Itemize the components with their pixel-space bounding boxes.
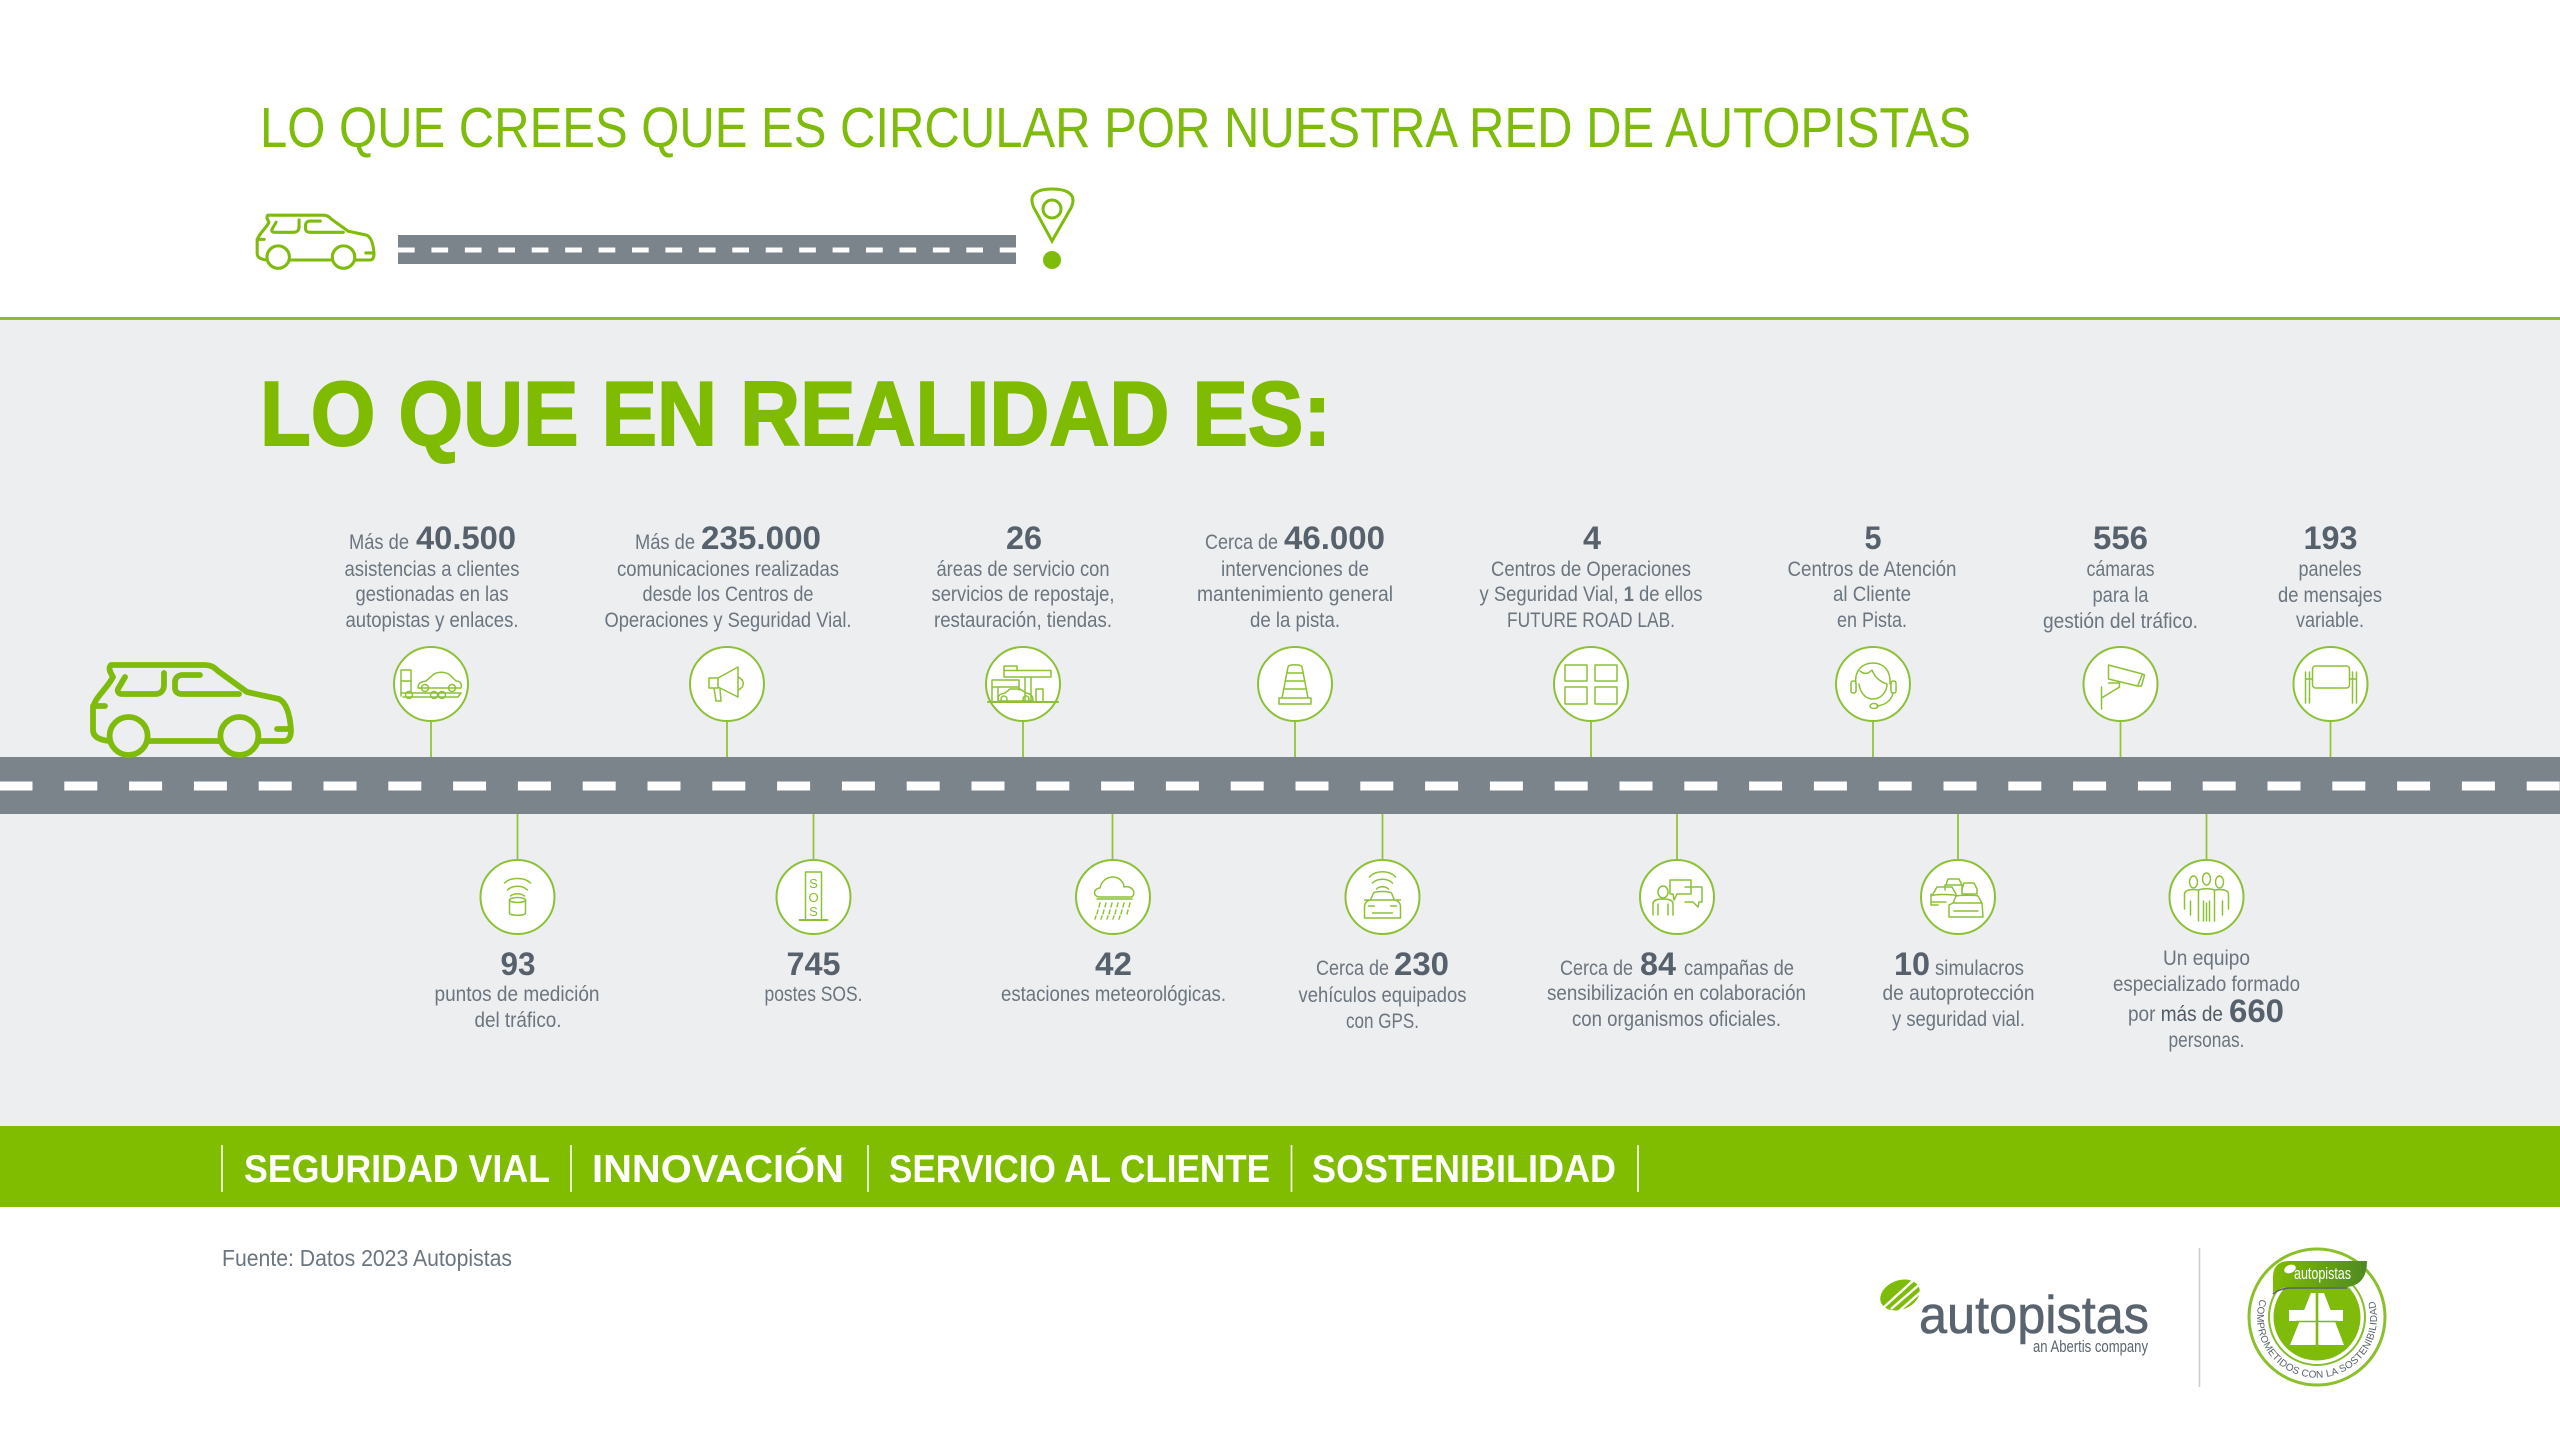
text: 40.500: 40.500 [416, 520, 516, 556]
text: 26: 26 [1006, 520, 1042, 556]
stat: 235.000 comunicaciones [604, 520, 852, 757]
text: 84: Cerca de [1560, 957, 1633, 980]
text: 46.000 [1197, 520, 1393, 632]
text: 235.000: Más de [635, 531, 695, 554]
text: 40.500: gestionadas en las [356, 583, 508, 606]
text: 235.000: 235.000 [701, 520, 821, 556]
stat: 660 personas [2113, 814, 2300, 1052]
stat: 4 centros de operaciones [1480, 520, 1702, 757]
icon: cctv camera [2084, 647, 2158, 721]
icon: control room grid [1554, 647, 1628, 721]
icon: location pin [1032, 189, 1073, 269]
text: 42: 42 [1095, 946, 1132, 982]
text: 235.000: comunicaciones realizadas [617, 558, 839, 581]
text: 10: 10 [1894, 946, 1930, 982]
icon: SOS post: S [809, 876, 818, 891]
text: 93: del tráfico. [474, 1009, 562, 1032]
section: expectation [257, 96, 1971, 269]
text: 745: postes SOS. [764, 983, 862, 1006]
heading: LO QUE EN REALIDAD ES: [260, 364, 1331, 465]
text: 230 [1298, 946, 1466, 1033]
band: values [0, 1126, 2560, 1207]
text: 5: Centros de Atención [1788, 558, 1956, 581]
stat: 193 paneles [2278, 520, 2382, 757]
text: 235.000: Operaciones y Seguridad Vial. [604, 609, 852, 632]
stat: 84 campañas [1547, 814, 1806, 1031]
icon: large car [93, 665, 291, 755]
text: 5: en Pista. [1837, 609, 1907, 632]
text: 556: para la [2092, 584, 2149, 607]
text: 660: Un equipo [2163, 947, 2250, 970]
text: 745 [764, 946, 862, 1006]
text: 235.000 [604, 520, 852, 632]
text: 5: 5 [1864, 520, 1882, 556]
band: values: SEGURIDAD VIAL [244, 1148, 550, 1191]
stat: 556 cámaras [2043, 520, 2198, 757]
icon: tow truck [394, 647, 468, 721]
text: 193 [2278, 520, 2382, 632]
road: short [398, 235, 1017, 264]
badge: comprometidos con la sostenibilidad [2248, 1248, 2386, 1386]
text: 4 [1480, 520, 1702, 632]
text: 26: servicios de repostaje, [932, 583, 1114, 606]
text: 193: paneles [2298, 558, 2362, 581]
text: 40.500: autopistas y enlaces. [346, 609, 518, 632]
icon: SOS post: O [808, 890, 819, 905]
icon: traffic sensor [480, 860, 554, 934]
text: 556: gestión del tráfico. [2043, 610, 2198, 633]
text: 40.500 [344, 520, 520, 632]
text: 660: personas. [2168, 1029, 2244, 1052]
text: 4: FUTURE ROAD LAB. [1507, 609, 1675, 632]
icon: GPS vehicle [1346, 860, 1420, 934]
stat: 46.000 intervenciones [1197, 520, 1393, 757]
text: 10: y seguridad vial. [1892, 1008, 2025, 1031]
text: 42: estaciones meteorológicas. [1001, 983, 1226, 1006]
text: 556 [2043, 520, 2198, 633]
text: 660: especializado formado [2113, 973, 2300, 996]
title: LO QUE CREES QUE ES CIRCULAR POR NUESTRA RED DE AUTOPISTAS [260, 96, 1971, 160]
icon: awareness speech bubbles [1640, 860, 1714, 934]
icon: message panel [2294, 647, 2368, 721]
text: 10: de autoprotección [1882, 982, 2034, 1005]
text: 84 [1547, 946, 1806, 1031]
band: values: SOSTENIBILIDAD [1312, 1148, 1616, 1191]
text: 230: con GPS. [1346, 1010, 1419, 1033]
text: 93: 93 [500, 946, 536, 982]
stat: 26 áreas de servicio [932, 520, 1114, 757]
text: 5: al Cliente [1833, 583, 1911, 606]
text: 5 [1788, 520, 1956, 632]
text: 46.000: intervenciones de [1221, 558, 1369, 581]
icon: cars in traffic [1921, 860, 1995, 934]
text: 230: Cerca de [1316, 957, 1389, 980]
text: 46.000: de la pista. [1250, 609, 1340, 632]
text: 26 [932, 520, 1114, 632]
badge: comprometidos con la sostenibilidad: autopistas [2294, 1264, 2351, 1283]
icon: team of people [2170, 860, 2244, 934]
text: 4: 4 [1583, 520, 1601, 556]
band: values: INNOVACIÓN [592, 1147, 844, 1191]
text: 660: por más de [2128, 1003, 2223, 1026]
text: 10: simulacros [1935, 957, 2024, 980]
road: main [0, 757, 2560, 814]
text: 556: cámaras [2086, 558, 2154, 581]
text: 46.000: Cerca de [1205, 531, 1278, 554]
stat: 5 centros de atención [1788, 520, 1956, 757]
text: 556: 556 [2093, 520, 2148, 556]
text: 193: de mensajes [2278, 584, 2382, 607]
logo: autopistas: an Abertis company [2033, 1337, 2148, 1356]
icon: megaphone [690, 647, 764, 721]
stat: 42 estaciones meteorológicas [1001, 814, 1226, 1006]
stat: 230 vehículos [1298, 814, 1466, 1033]
text: 84: 84 [1640, 946, 1676, 982]
stat: 745 postes SOS [764, 814, 862, 1006]
text: 230: vehículos equipados [1298, 984, 1466, 1007]
panel: reality [0, 317, 2560, 1127]
text: 230: 230 [1394, 946, 1449, 982]
text: 10 [1882, 946, 2034, 1031]
stat: 93 puntos de medición [434, 814, 600, 1032]
text: 84: campañas de [1684, 957, 1794, 980]
text: 193: 193 [2304, 520, 2358, 556]
logo: autopistas: autopistas [1919, 1286, 2149, 1345]
text: 193: variable. [2296, 609, 2364, 632]
text: 40.500: asistencias a clientes [344, 558, 520, 581]
badge: comprometidos con la sostenibilidad: COMPROMETIDOS CON LA SOSTENIBILIDAD [2257, 1300, 2377, 1378]
text: 235.000: desde los Centros de [642, 583, 814, 606]
text: 660: 660 [2229, 993, 2284, 1029]
text: 4: y Seguridad Vial, 1 de ellos [1480, 583, 1702, 606]
icon: rain cloud [1076, 860, 1150, 934]
text: 46.000: 46.000 [1284, 520, 1385, 556]
text: 40.500: Más de [349, 531, 409, 554]
icon: SOS post [776, 860, 850, 934]
text: 26: restauración, tiendas. [934, 609, 1112, 632]
stat: 10 simulacros [1882, 814, 2034, 1031]
stat: 40.500 asistencias [344, 520, 520, 757]
icon: service station [986, 647, 1060, 721]
icon: traffic cone [1258, 647, 1332, 721]
text: 26: áreas de servicio con [936, 558, 1110, 581]
text: 84: sensibilización en colaboración [1547, 982, 1806, 1005]
icon: small car [257, 215, 374, 268]
text: 4: Centros de Operaciones [1491, 558, 1691, 581]
text: 745: 745 [786, 946, 840, 982]
icon: SOS post: S [809, 904, 818, 919]
logo: autopistas [1876, 1274, 2149, 1356]
band: values: SERVICIO AL CLIENTE [889, 1148, 1270, 1191]
source note: Fuente: Datos 2023 Autopistas [222, 1245, 512, 1271]
text: 42 [1001, 946, 1226, 1006]
text: 46.000: mantenimiento general [1197, 583, 1393, 606]
text: 93 [434, 946, 600, 1032]
text: 660 [2113, 947, 2300, 1052]
text: 84: con organismos oficiales. [1572, 1008, 1781, 1031]
icon: call agent [1836, 647, 1910, 721]
text: 93: puntos de medición [434, 983, 600, 1006]
